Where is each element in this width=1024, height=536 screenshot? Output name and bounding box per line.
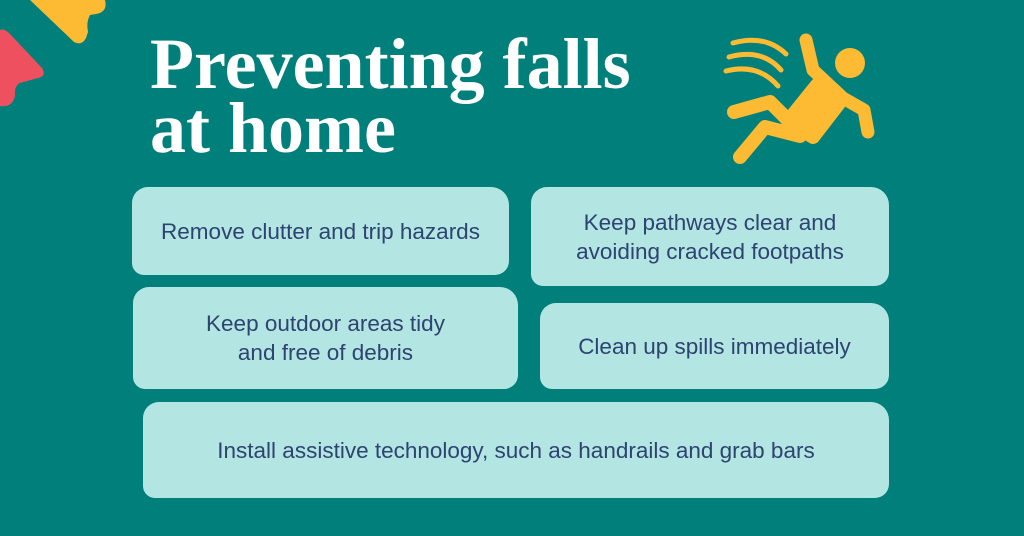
- decorative corner shapes: [0, 0, 106, 106]
- box: clean spills: [540, 303, 889, 389]
- box: clean spills: Clean up spills immediately: [578, 334, 851, 358]
- box: keep pathways clear: [531, 187, 889, 286]
- title: Preventing falls: [150, 24, 631, 104]
- box: outdoor areas: [133, 287, 518, 389]
- box: keep pathways clear: Keep pathways clear and: [584, 210, 836, 234]
- title: at home: [150, 88, 396, 168]
- box: assistive technology: [143, 402, 889, 498]
- shape: yellow arrow: [30, 0, 106, 43]
- box: remove clutter: Remove clutter and trip hazards: [161, 218, 480, 244]
- title: [150, 24, 631, 168]
- box: outdoor areas: Keep outdoor areas tidy: [206, 311, 445, 336]
- box: keep pathways clear: avoiding cracked footpaths: [576, 238, 844, 264]
- box: remove clutter: [132, 187, 509, 275]
- shape: red arrow: [0, 30, 44, 106]
- box: outdoor areas: and free of debris: [238, 340, 413, 365]
- icon: falling person: [724, 34, 874, 164]
- box: assistive technology: Install assistive technology, such as handrails and grab bars: [217, 438, 815, 462]
